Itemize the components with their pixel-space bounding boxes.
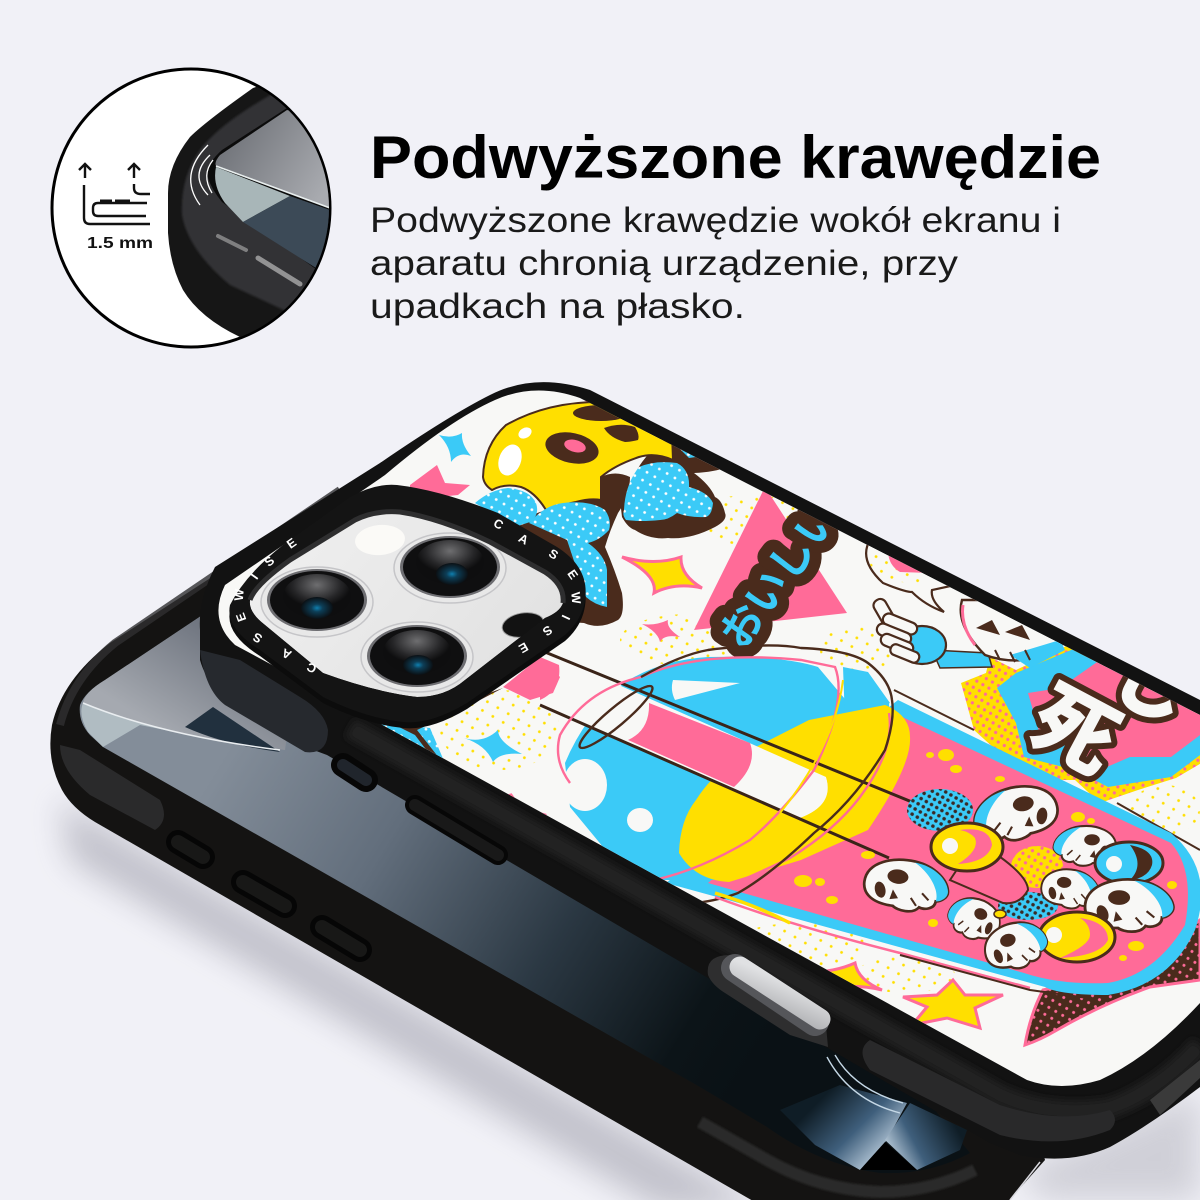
camera ring with brand lettering: W bbox=[568, 591, 583, 605]
back phone screen bbox=[80, 590, 970, 1173]
lens bottom bbox=[361, 622, 473, 692]
pink corner triangle bbox=[585, 400, 588, 402]
lens top right bbox=[394, 533, 506, 603]
japanese label: おいしい bbox=[703, 488, 851, 659]
back phone buttons bbox=[178, 842, 360, 950]
phone case artwork bbox=[200, 370, 1200, 1100]
camera ring with brand lettering: C bbox=[305, 659, 319, 676]
heading: Podwyższone krawędzie bbox=[370, 124, 1101, 191]
camera ring with brand lettering: E bbox=[516, 639, 530, 656]
icon: cyan sparkle bbox=[439, 433, 471, 462]
camera ring with brand lettering: S bbox=[262, 553, 277, 570]
camera ring with brand lettering: S bbox=[251, 629, 265, 646]
camera ring with brand lettering: W bbox=[232, 588, 247, 601]
corner bumper, left bbox=[200, 650, 328, 752]
lens left bbox=[261, 567, 373, 637]
halftone yellow dots bbox=[440, 495, 1200, 993]
pink triangle label bbox=[694, 487, 847, 630]
camera glass window bbox=[250, 512, 563, 697]
icon: pink bow bbox=[410, 465, 470, 496]
inset: phone corner close-up bbox=[168, 87, 329, 337]
cup rim rings bbox=[558, 657, 839, 880]
camera ring with brand lettering: I bbox=[248, 571, 261, 582]
zigzag burst with kanji: 死 bbox=[1012, 651, 1143, 797]
icon label: 1.5 mm: 1.5 mm bbox=[87, 235, 153, 252]
icon: yellow star bbox=[903, 980, 1003, 1028]
camera ring with brand lettering: C bbox=[491, 516, 506, 533]
icon: yellow sparkle low bbox=[826, 960, 882, 992]
icon: pink sparkle bbox=[642, 620, 680, 642]
camera ring with brand lettering: I bbox=[559, 613, 573, 622]
microphone hole bbox=[500, 610, 546, 640]
boba pearls and skulls bbox=[861, 779, 1173, 975]
front phone frame bbox=[200, 382, 1200, 1159]
dark halftone burst bbox=[1025, 920, 1200, 1045]
circular detail inset bbox=[52, 60, 340, 360]
silver charging button bbox=[708, 955, 828, 1047]
pink shape fragment bbox=[503, 657, 560, 700]
camera ring with brand lettering bbox=[229, 485, 586, 722]
icon: cyan sparkle low bbox=[464, 730, 522, 762]
flash bbox=[354, 523, 406, 557]
camera ring with brand lettering: E bbox=[284, 535, 299, 552]
camera ring with brand lettering: A bbox=[516, 531, 531, 548]
corner bumper, bottom right bbox=[862, 1040, 1115, 1141]
camera module bbox=[229, 485, 586, 728]
speech bubble bbox=[865, 544, 950, 613]
camera ring with brand lettering: E bbox=[233, 611, 249, 624]
camera ring with brand lettering: S bbox=[540, 622, 555, 639]
body text: Podwyższone krawędzie wokół ekranu i bbox=[370, 201, 1061, 240]
straw bbox=[586, 686, 828, 818]
back phone bbox=[50, 478, 1045, 1200]
cyan bow fragment bbox=[381, 724, 443, 758]
drop shadows bbox=[60, 800, 1200, 1200]
yellow dots on pink bbox=[794, 749, 1177, 961]
front phone buttons bbox=[343, 765, 498, 855]
camera ring with brand lettering: A bbox=[280, 645, 294, 662]
body text bbox=[370, 201, 1061, 326]
skull mascot bbox=[475, 402, 727, 626]
camera ring with brand lettering: E bbox=[564, 567, 581, 582]
back phone lower-right edge bbox=[1010, 1162, 1040, 1200]
camera ring with brand lettering: S bbox=[546, 546, 561, 563]
icon: yellow sparkle bbox=[622, 557, 702, 593]
zigzag burst with kanji bbox=[961, 646, 1200, 801]
bubble tea cup bbox=[540, 645, 1200, 999]
body text: aparatu chronią urządzenie, przy bbox=[370, 244, 959, 283]
skeleton and hand bbox=[871, 597, 1065, 668]
icon: pink and yellow star fragment bbox=[508, 793, 546, 816]
body text: upadkach na płasko. bbox=[370, 287, 745, 326]
icon: raised edge diagram bbox=[79, 164, 150, 224]
